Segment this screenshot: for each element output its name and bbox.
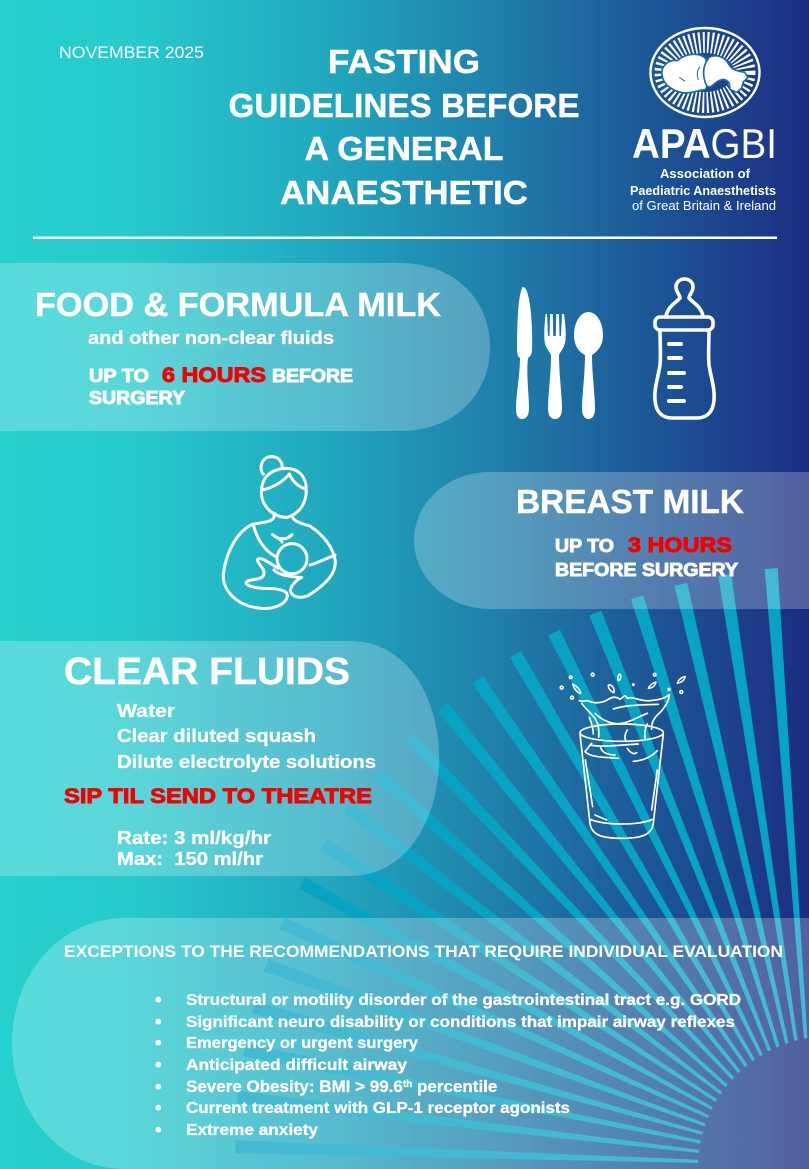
panel: exceptions [12,918,809,1169]
icon: glass of water with splash [560,673,685,838]
fasting time: 6 hours: UP TO [89,366,149,386]
title: FASTING [328,44,480,81]
logo strapline [630,166,776,213]
bullet list of exceptions: • [155,1033,162,1054]
date: NOVEMBER 2025 [59,44,204,62]
bullet list of exceptions: Significant neuro disability or conditions that impair airway reflexes [186,1014,735,1031]
rate and maximum [117,828,271,869]
fasting time: 3 hours: BEFORE SURGERY [555,560,738,580]
icon: mother breastfeeding [223,457,335,608]
list of clear fluids: Dilute electrolyte solutions [117,752,376,772]
fasting time: 6 hours: BEFORE [272,366,353,386]
fasting time: 6 hours: 6 HOURS [162,364,266,387]
logo emblem: baby in oval [650,28,760,117]
list of clear fluids: Water [117,701,175,721]
panel: breast milk [414,472,809,609]
logo strapline: Association of [660,166,751,181]
title [228,44,580,212]
bullet list of exceptions: Anticipated difficult airway [186,1057,407,1074]
fasting time: 3 hours [555,534,738,580]
logo wordmark: APAGBI [632,120,777,167]
icon: cutlery [516,287,603,419]
bullet list of exceptions: th [403,1079,412,1090]
title: GUIDELINES BEFORE [228,88,580,125]
rate and maximum: Rate: 3 ml/kg/hr [117,828,271,848]
heading: breast milk: BREAST MILK [516,483,744,520]
bullet list of exceptions: Severe Obesity: BMI > 99.6 [186,1077,403,1096]
logo strapline: Paediatric Anaesthetists [630,183,776,198]
bullet list of exceptions [155,990,741,1141]
bullet list of exceptions: Current treatment with GLP-1 receptor agonists [186,1100,570,1117]
bullet list of exceptions: • [155,1012,162,1033]
bullet list of exceptions: • [155,1120,162,1141]
icon: baby bottle [655,279,714,418]
list of clear fluids: Clear diluted squash [117,726,316,746]
bullet list of exceptions: • [155,1098,162,1119]
bullet list of exceptions: • [155,1077,162,1098]
bullet list of exceptions: • [155,1055,162,1076]
fasting time: 3 hours: UP TO [555,536,614,556]
fasting time: 6 hours [89,364,353,408]
heading: food and formula milk: FOOD & FORMULA MILK [35,286,441,323]
APAGBI logo [630,28,777,213]
panel: clear fluids [0,641,439,876]
subheading: and other non-clear fluids [88,328,334,348]
panel: food and formula milk [0,263,490,431]
bullet list of exceptions: Extreme anxiety [186,1122,318,1139]
fasting time: 3 hours: 3 HOURS [628,534,732,557]
list of clear fluids [117,701,376,772]
bullet list of exceptions: percentile [412,1077,497,1096]
bullet list of exceptions: • [155,990,162,1011]
heading: exceptions: EXCEPTIONS TO THE RECOMMENDATIONS THAT REQUIRE INDIVIDUAL EVALUATION [64,942,783,961]
fasting time: 6 hours: SURGERY [89,388,185,408]
header divider [33,236,777,239]
title: ANAESTHETIC [280,175,528,212]
heading: clear fluids: CLEAR FLUIDS [64,651,350,693]
sunburst rays [235,568,809,1168]
bullet list of exceptions: Emergency or urgent surgery [186,1035,418,1052]
logo strapline: of Great Britain & Ireland [632,198,776,213]
sip til send callout: SIP TIL SEND TO THEATRE [64,785,372,808]
rate and maximum: Max: 150 ml/hr [117,849,263,869]
title: A GENERAL [304,131,504,168]
bullet list of exceptions: Structural or motility disorder of the gastrointestinal tract e.g. GORD [186,992,741,1009]
